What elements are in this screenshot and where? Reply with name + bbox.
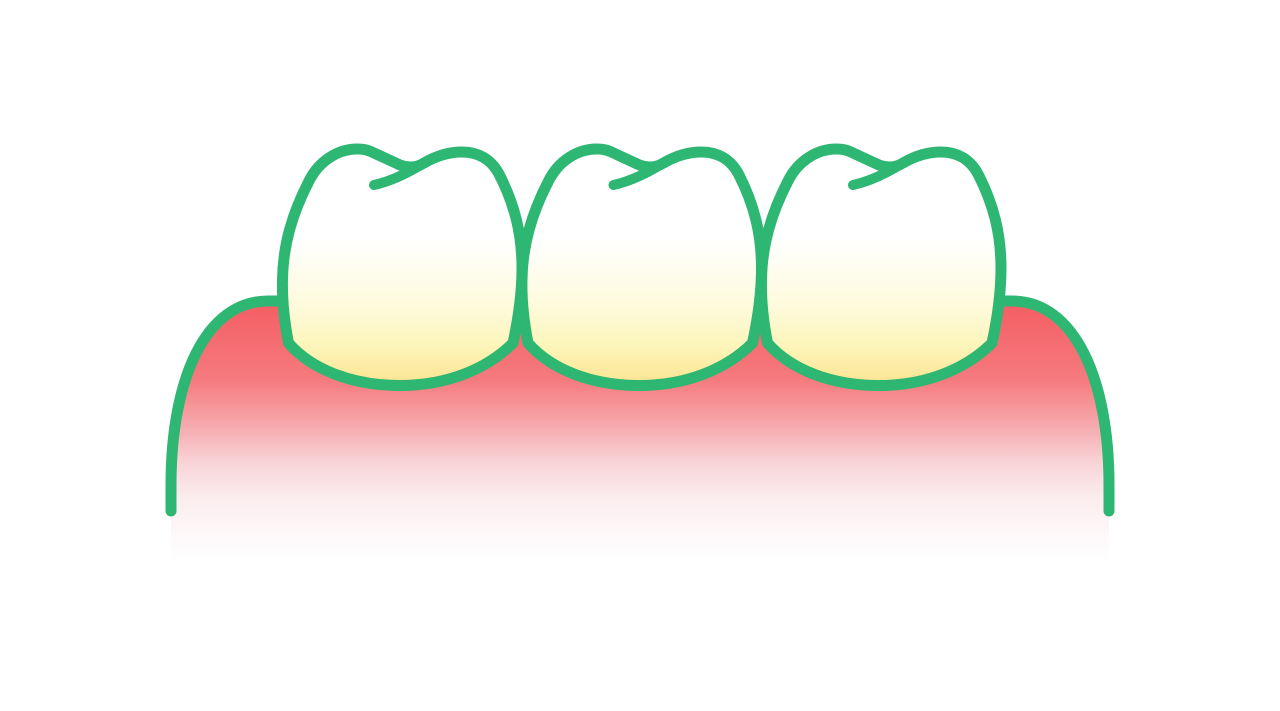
gum outline right bbox=[995, 301, 1109, 511]
tooth: right bbox=[761, 149, 1001, 386]
fissure bbox=[614, 163, 664, 185]
tooth: middle bbox=[522, 149, 762, 386]
gum outline left bbox=[171, 301, 285, 511]
fissure bbox=[374, 163, 424, 185]
tooth: left bbox=[282, 149, 522, 386]
fissure bbox=[853, 163, 903, 185]
gum fill bbox=[171, 301, 1109, 562]
gums bbox=[171, 301, 1109, 562]
